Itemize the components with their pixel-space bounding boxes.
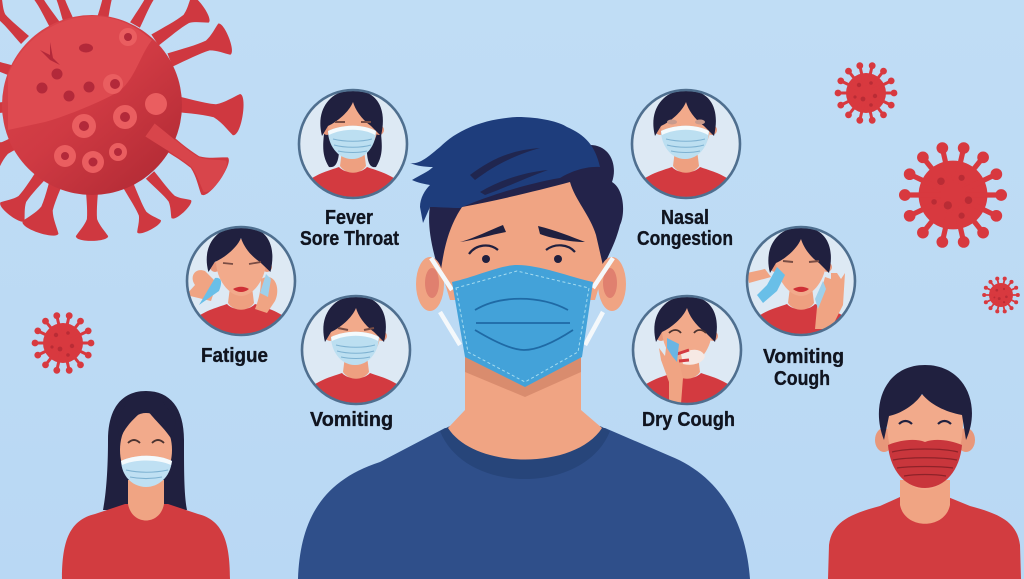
label: Nasal Congestion: [637, 207, 733, 250]
label: Fever Sore Throat: Sore Throat: [300, 228, 399, 250]
man red mask: [888, 440, 962, 488]
label: Vomiting Cough: Cough: [774, 368, 830, 390]
woman face: [120, 413, 172, 487]
label: Vomiting: Vomiting: [310, 409, 393, 431]
label: Vomiting Cough: [763, 346, 844, 390]
icon: virus right: [899, 142, 1007, 248]
woman bottom left: [62, 391, 230, 579]
blue hair: [410, 117, 600, 223]
man face: [887, 395, 963, 490]
label: Fatigue: Fatigue: [201, 345, 268, 367]
main person: [298, 117, 750, 579]
label: Dry Cough: Dry Cough: [642, 409, 735, 431]
icon: large red virus: [0, 0, 246, 241]
label: Vomiting Cough: Vomiting: [763, 346, 844, 368]
woman mask: [121, 456, 172, 487]
shirt: [298, 428, 750, 579]
avatar: fatigue: [186, 226, 295, 341]
man shirt: [828, 497, 1021, 579]
mask straps: [431, 258, 613, 345]
face: [441, 182, 604, 300]
ears: [416, 257, 444, 311]
label: Nasal Congestion: Nasal: [661, 207, 709, 229]
icon: small virus left: [32, 312, 94, 374]
icon: virus top right: [835, 62, 897, 124]
blue face mask: [452, 265, 593, 387]
man bottom right: [828, 365, 1021, 579]
back hair: [429, 130, 623, 268]
avatar: nasal congestion: [632, 90, 740, 204]
woman hair: [103, 391, 187, 510]
man ears: [875, 428, 893, 452]
label: Nasal Congestion: Congestion: [637, 228, 733, 250]
eyebrows: [460, 225, 585, 242]
woman shirt: [62, 504, 230, 579]
label: Fever Sore Throat: [300, 207, 399, 250]
woman neck: [128, 480, 164, 520]
avatar: fever: [299, 90, 407, 204]
man hair: [879, 365, 972, 440]
neck: [448, 340, 602, 460]
shirt collar: [440, 426, 610, 479]
avatar: dry cough: [633, 296, 741, 410]
avatar: vomiting cough: [747, 227, 855, 341]
eyes: [469, 245, 575, 254]
icon: tiny virus right: [982, 277, 1020, 313]
avatar: vomiting: [302, 296, 410, 410]
label: Fever Sore Throat: Fever: [325, 207, 373, 229]
